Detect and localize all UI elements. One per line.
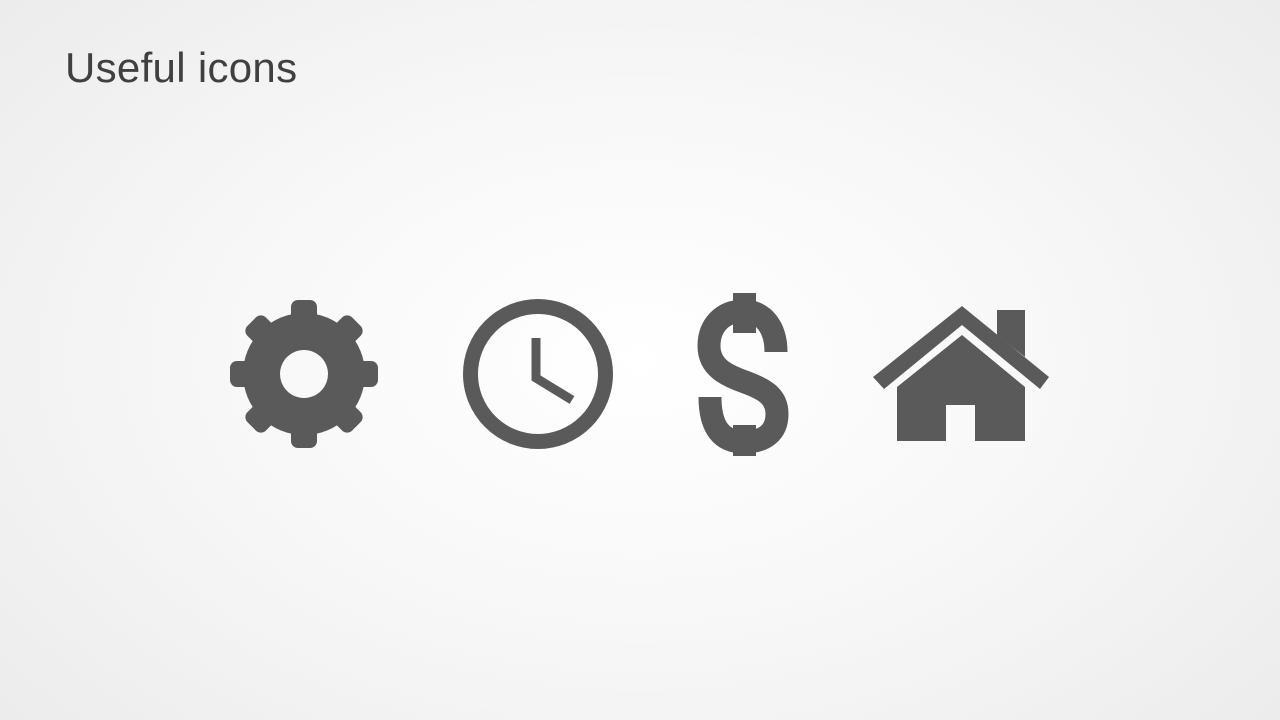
icon: clock (470, 306, 606, 442)
title: Useful icons (65, 44, 297, 91)
icon: house (873, 306, 1049, 441)
icon: gear (230, 300, 378, 448)
icon: dollar (709, 293, 777, 456)
